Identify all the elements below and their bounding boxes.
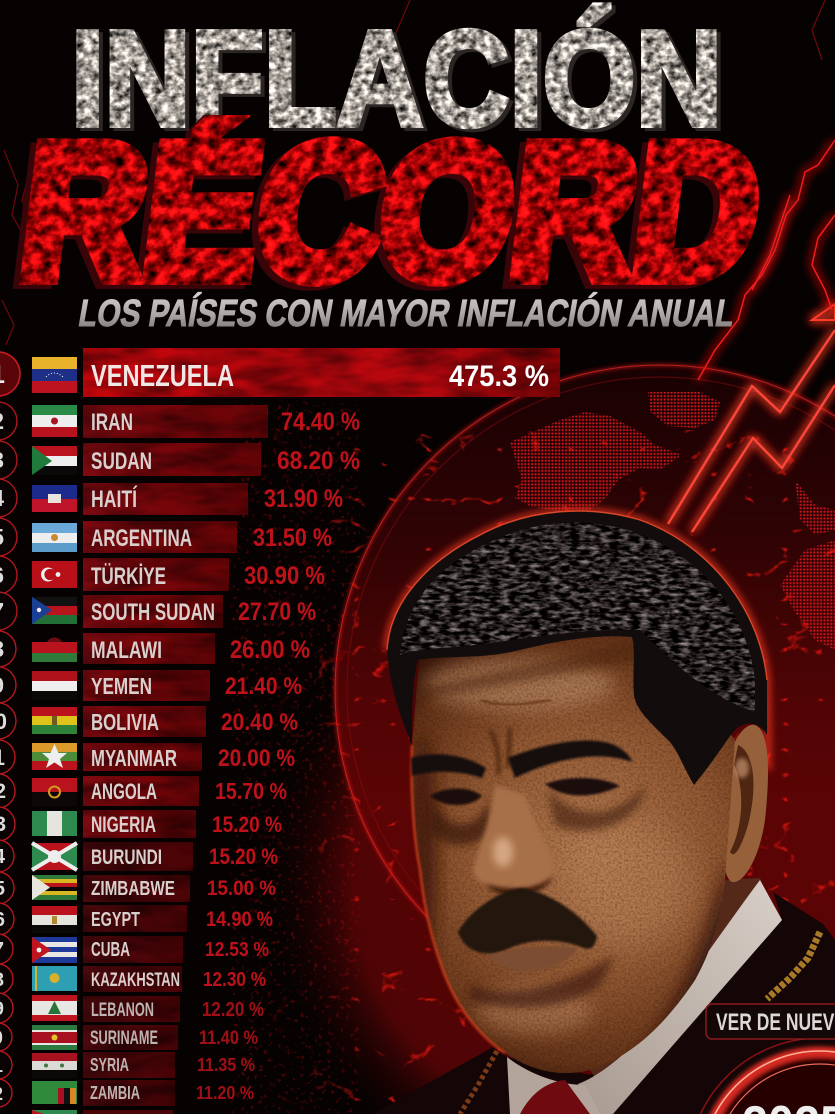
globe [335, 365, 835, 1015]
name: Suriname: SURINAME [90, 1028, 158, 1049]
rank row 14: Burundi [0, 840, 278, 872]
portrait: lower lip [488, 946, 578, 971]
portrait: left eyebrow [411, 754, 486, 778]
portrait: frown lines [490, 728, 510, 775]
portrait: ear detail [730, 745, 753, 854]
flag: Argentina [32, 523, 77, 552]
rank badge 15 [0, 872, 14, 904]
value: Haití: 31.90 % [264, 485, 343, 513]
rank row 8: Malawi [0, 631, 310, 667]
portrait: ear [721, 725, 768, 882]
bar: South Sudan [83, 595, 223, 628]
name: South Sudan: SOUTH SUDAN [91, 599, 215, 626]
name: Yemen: YEMEN [91, 673, 152, 699]
flag: Zimbabwe [32, 875, 77, 900]
portrait: gold chain [767, 932, 820, 999]
bar: Suriname [83, 1025, 178, 1050]
flag: Iran [32, 405, 77, 437]
value: Suriname: 11.40 % [199, 1028, 258, 1049]
bar: Egypt [83, 905, 187, 932]
rank row 3: Sudan [0, 441, 360, 479]
rank row 4: Haití [0, 479, 343, 517]
portrait: hair rim line [387, 511, 767, 680]
title: INFLACIÓN: INFLACIÓN [71, 3, 722, 154]
flag: Yemen [32, 671, 77, 700]
rank badge 17 [0, 934, 13, 964]
flag: Syria [32, 1053, 77, 1078]
name: Malawi: MALAWI [91, 637, 162, 664]
rank row 15: Zimbabwe [0, 872, 276, 904]
bar: Iran [83, 405, 268, 438]
rank badge 6 [0, 556, 17, 594]
flag: Burundi [32, 843, 77, 870]
background: top red cracks [2, 0, 825, 345]
value: Egypt: 14.90 % [206, 908, 273, 931]
value: Yemen: 21.40 % [225, 673, 302, 700]
name: Zimbabwe: ZIMBABWE [91, 878, 175, 900]
portrait: orange face rim [411, 745, 505, 1053]
flag: Lebanon [32, 995, 77, 1021]
bar: Malawi [83, 633, 215, 664]
flag: Myanmar [32, 743, 77, 770]
portrait: hair [387, 511, 767, 785]
portrait: skin grain [412, 636, 735, 1073]
bar: Zimbabwe [83, 875, 190, 902]
name: Zambia: ZAMBIA [90, 1083, 140, 1103]
rank row 17: Cuba [0, 934, 269, 964]
portrait: ear highlight [735, 758, 749, 778]
portrait: stylised man [373, 511, 835, 1114]
flag: South Sudan [32, 597, 77, 624]
rank row 22: Zambia [0, 1079, 254, 1107]
flag: Bolivia [32, 707, 77, 734]
value: Bolivia: 20.40 % [221, 709, 298, 736]
portrait: left chain [460, 1051, 497, 1114]
rank row 20: Suriname [0, 1023, 258, 1051]
name: Venezuela: VENEZUELA [91, 358, 234, 393]
value: Lebanon: 12.20 % [202, 999, 264, 1021]
name: Haití: HAITÍ [91, 485, 138, 513]
bar: Cuba [83, 936, 183, 963]
bar: Argentina [83, 521, 237, 553]
bar: Haití [83, 483, 248, 515]
background: lava cracks texture [240, 430, 835, 1114]
name: Angola: ANGOLA [91, 779, 157, 804]
bar: Lebanon [83, 996, 180, 1022]
flag: Egypt [32, 906, 77, 933]
value: Argentina: 31.50 % [253, 524, 332, 552]
rank row 11: Myanmar [0, 740, 295, 774]
rank badge 19 [0, 993, 13, 1023]
value: Türkiye: 30.90 % [244, 562, 325, 590]
rank badge 11 [0, 740, 15, 774]
rank badge 20 [0, 1023, 12, 1051]
title: RÉCORD: RÉCORD [11, 106, 771, 318]
name: Türkiye: TÜRKİYE [91, 563, 166, 590]
portrait: neck [590, 878, 775, 1085]
flag: Sudan [32, 446, 77, 475]
name: Egypt: EGYPT [91, 909, 140, 931]
rank badge 8 [0, 631, 16, 667]
value: Zambia: 11.20 % [196, 1083, 254, 1103]
rank row 23: partial flag and bar [32, 1110, 173, 1114]
flag: Venezuela [32, 357, 77, 393]
rank row 19: Lebanon [0, 993, 264, 1023]
bar: Zambia [83, 1080, 175, 1106]
portrait: hair texture [400, 523, 755, 712]
rank badge 22 [0, 1079, 12, 1107]
rank row 1: Venezuela [0, 348, 560, 397]
bar: Angola [83, 776, 199, 806]
value: Sudan: 68.20 % [277, 447, 360, 475]
portrait: moustache [458, 888, 597, 953]
flag: Türkiye [32, 561, 77, 588]
rank badge 18 [0, 964, 13, 994]
flag: Nigeria [32, 811, 77, 836]
portrait: face [411, 620, 735, 1073]
name: Syria: SYRIA [90, 1055, 129, 1075]
rank badge 13 [0, 807, 15, 841]
name: Cuba: CUBA [91, 939, 130, 961]
rank badge 9 [0, 667, 16, 703]
rank badge 21 [0, 1051, 12, 1079]
bar: Myanmar [83, 743, 202, 771]
flag: Cuba [32, 937, 77, 963]
value: Malawi: 26.00 % [230, 636, 310, 664]
flag: Suriname [32, 1025, 77, 1050]
rank badge 14 [0, 840, 14, 872]
value: Burundi: 15.20 % [209, 844, 278, 869]
name: Kazakhstan: KAZAKHSTAN [91, 970, 180, 991]
flag: Kazakhstan [32, 966, 77, 991]
portrait: nose [473, 785, 554, 888]
value: South Sudan: 27.70 % [238, 598, 316, 626]
button: ver de nuevo [706, 1004, 835, 1039]
portrait: forehead crease [480, 700, 552, 705]
name: Nigeria: NIGERIA [91, 812, 156, 837]
rank badge 10 [0, 703, 16, 739]
bar: Sudan [83, 443, 261, 476]
bar: Bolivia [83, 706, 206, 737]
portrait: left eye [430, 788, 482, 805]
rank badge 4 [0, 479, 17, 517]
rank row 16: Egypt [0, 903, 273, 935]
bar: Syria [83, 1052, 175, 1078]
portrait: facial shading [400, 620, 760, 1090]
bar: Kazakhstan [83, 966, 182, 992]
name: Myanmar: MYANMAR [91, 745, 177, 771]
value: Angola: 15.70 % [215, 778, 287, 804]
flag: Haití [32, 485, 77, 512]
background: red glow field [240, 500, 835, 1114]
rank row 12: Angola [0, 774, 287, 808]
name: Burundi: BURUNDI [91, 846, 162, 869]
portrait: left collar [507, 1057, 600, 1114]
rank badge 2 [0, 402, 17, 440]
rank row 2: Iran [0, 402, 360, 440]
value: Nigeria: 15.20 % [212, 812, 282, 837]
rank badge 3 [0, 441, 17, 479]
name: Argentina: ARGENTINA [91, 525, 192, 552]
bar: Venezuela [83, 348, 560, 397]
rank badge 1 [0, 352, 20, 396]
value: Syria: 11.35 % [197, 1055, 255, 1075]
bar: Nigeria [83, 810, 196, 838]
name: Bolivia: BOLIVIA [91, 709, 159, 735]
rank row 5: Argentina [0, 518, 332, 556]
rank row 13: Nigeria [0, 807, 282, 841]
year ring badge [688, 1038, 835, 1114]
rank row 10: Bolivia [0, 703, 298, 739]
rank badge 12 [0, 774, 15, 808]
bar: Burundi [83, 842, 193, 871]
value: Kazakhstan: 12.30 % [203, 969, 266, 991]
value: Cuba: 12.53 % [205, 939, 269, 961]
rank row 21: Syria [0, 1051, 255, 1079]
ranking list [0, 348, 560, 1114]
name: Iran: IRAN [91, 409, 133, 436]
bar: Yemen [83, 670, 210, 701]
portrait: jacket [373, 892, 835, 1114]
rank row 18: Kazakhstan [0, 964, 266, 994]
rank row 6: Türkiye [0, 556, 325, 594]
rank badge 7 [0, 592, 17, 630]
background: left speckles [230, 400, 360, 1114]
flag: Angola [32, 778, 77, 806]
value: Iran: 74.40 % [281, 408, 360, 436]
rank row 7: South Sudan [0, 592, 316, 630]
rank badge 16 [0, 903, 14, 935]
rank row 9: Yemen [0, 667, 302, 703]
portrait: tie [520, 1080, 590, 1114]
globe rim [335, 365, 835, 1015]
lightning bolts upper right [698, 140, 835, 380]
value: Myanmar: 20.00 % [218, 745, 295, 772]
portrait: nose highlight [493, 837, 513, 867]
flag: Zambia [32, 1081, 77, 1104]
bar: Türkiye [83, 558, 229, 591]
portrait: right eyebrow [508, 741, 632, 778]
name: Sudan: SUDAN [91, 448, 152, 475]
portrait: nose shadow [486, 876, 554, 896]
rank badge 5 [0, 518, 17, 556]
lightning arrow chart line [668, 304, 835, 532]
flag: Malawi [32, 637, 77, 662]
value: Zimbabwe: 15.00 % [207, 877, 276, 900]
portrait: right eye [545, 778, 620, 796]
name: Lebanon: LEBANON [91, 1000, 154, 1021]
portrait: rim glow [387, 511, 768, 770]
portrait: white collar [578, 880, 782, 1114]
globe: dotted continents [510, 392, 835, 650]
value: Venezuela: 475.3 % [449, 360, 549, 393]
